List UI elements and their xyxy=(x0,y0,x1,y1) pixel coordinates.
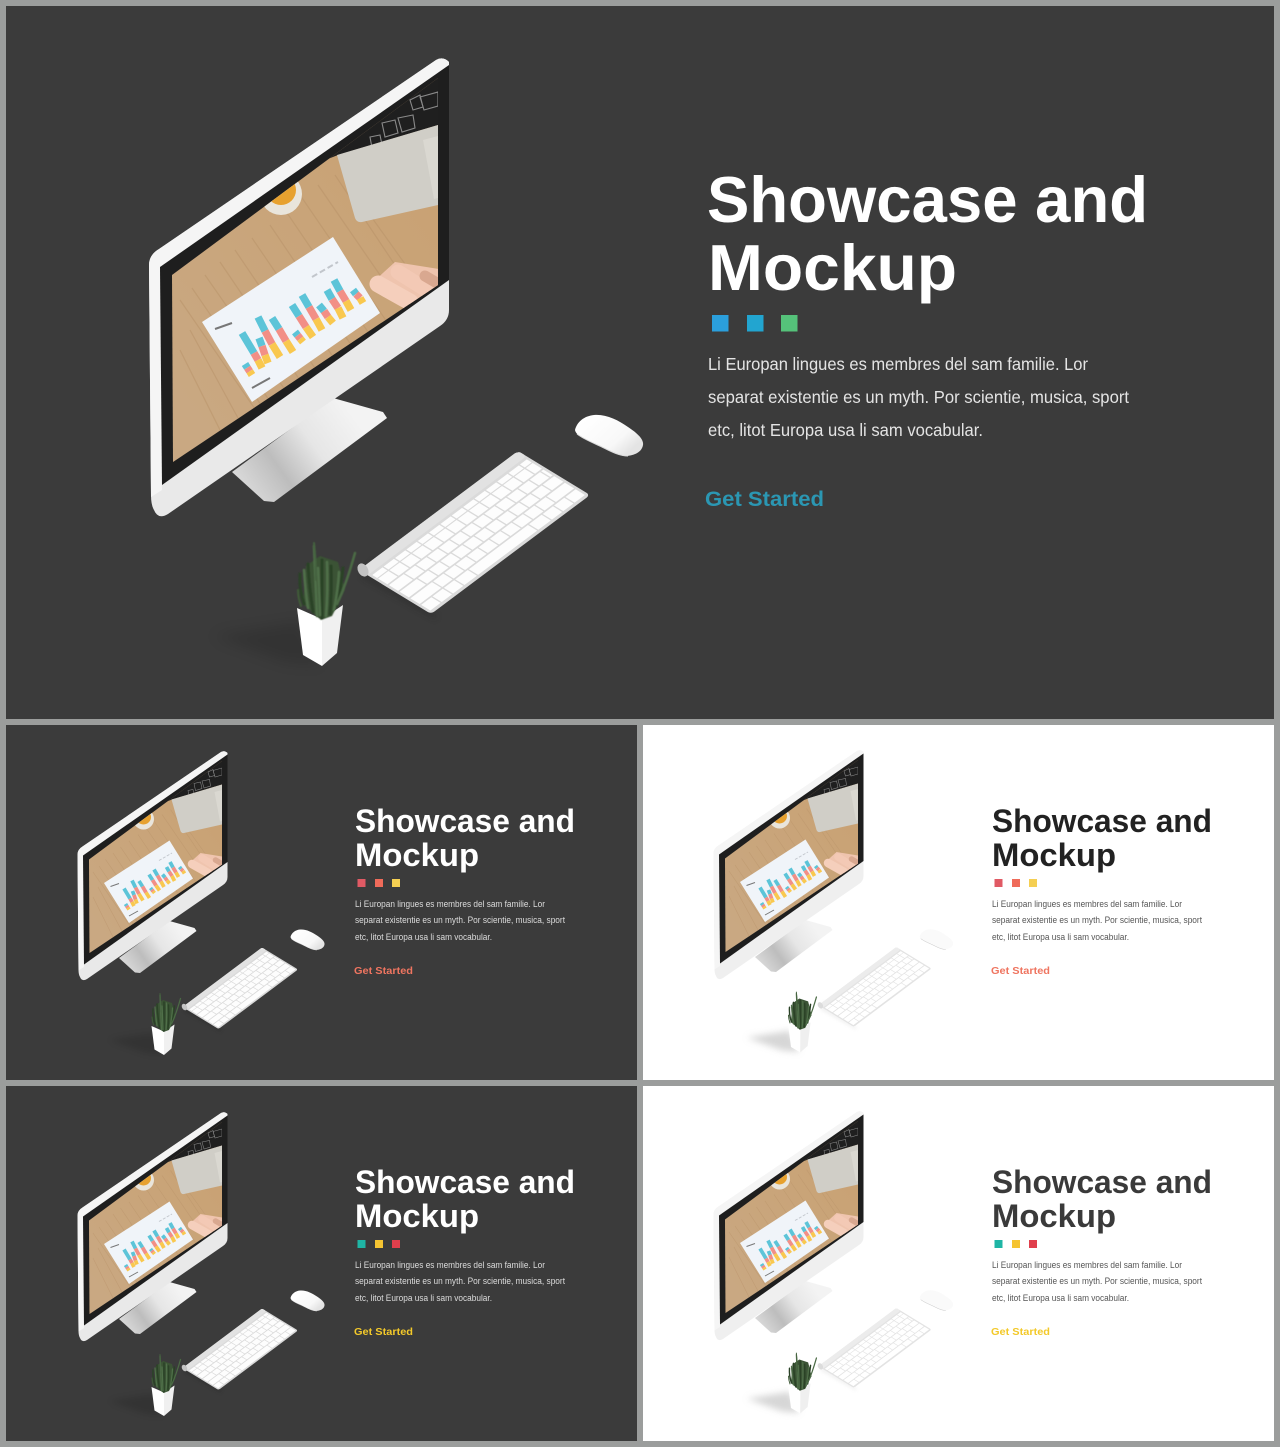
call to action: Get Started xyxy=(354,1326,413,1338)
heading: Showcase and xyxy=(992,803,1212,839)
icon: monitor xyxy=(78,1112,228,1341)
icon: mouse xyxy=(575,415,643,456)
heading xyxy=(707,163,1148,304)
mockup scene xyxy=(78,1112,325,1416)
heading: Showcase and xyxy=(355,1164,575,1200)
panel: dark variant, warm accents xyxy=(6,725,637,1080)
icon: monitor xyxy=(78,751,228,980)
body text: etc, litot Europa usa li sam vocabular. xyxy=(992,1293,1129,1303)
body text: separat existentie es un myth. Por scientie, musica, sport xyxy=(992,915,1203,925)
heading xyxy=(355,1164,575,1234)
body text xyxy=(355,1260,566,1303)
panel: white variant, teal accents xyxy=(643,1086,1274,1441)
body text: separat existentie es un myth. Por scientie, musica, sport xyxy=(355,1276,566,1286)
heading: Mockup xyxy=(355,1198,479,1234)
icon: mouse xyxy=(290,1290,325,1311)
colour squares xyxy=(358,1240,400,1248)
colour squares xyxy=(994,879,1037,887)
heading: Showcase and xyxy=(992,1164,1212,1200)
icon: keyboard xyxy=(181,948,298,1032)
icon: mouse xyxy=(920,1290,953,1310)
mockup scene xyxy=(714,750,953,1052)
body text: etc, litot Europa usa li sam vocabular. xyxy=(708,420,983,440)
panel: main dark showcase xyxy=(6,6,1274,719)
icon: keyboard xyxy=(817,1308,932,1391)
body text xyxy=(992,899,1203,942)
panel: white variant, warm accents xyxy=(643,725,1274,1080)
body text: Li Europan lingues es membres del sam familie. Lor xyxy=(708,354,1088,374)
body text: etc, litot Europa usa li sam vocabular. xyxy=(355,932,492,942)
icon: keyboard xyxy=(817,947,932,1030)
heading xyxy=(992,1164,1212,1234)
body text: separat existentie es un myth. Por scientie, musica, sport xyxy=(708,387,1129,407)
heading: Mockup xyxy=(992,837,1116,873)
body text: Li Europan lingues es membres del sam familie. Lor xyxy=(355,899,545,909)
body text: separat existentie es un myth. Por scientie, musica, sport xyxy=(992,1276,1203,1286)
icon: plant xyxy=(747,1353,816,1413)
body text: etc, litot Europa usa li sam vocabular. xyxy=(355,1293,492,1303)
colour squares xyxy=(712,315,798,332)
heading: Showcase and xyxy=(355,803,575,839)
icon: monitor xyxy=(714,750,864,979)
call to action: Get Started xyxy=(705,488,824,511)
body text: Li Europan lingues es membres del sam familie. Lor xyxy=(992,899,1182,909)
body text xyxy=(992,1260,1203,1303)
icon: monitor xyxy=(149,58,449,516)
mockup scene xyxy=(149,58,643,666)
heading xyxy=(992,803,1212,873)
panel: dark variant, teal accents xyxy=(6,1086,637,1441)
body text: etc, litot Europa usa li sam vocabular. xyxy=(992,932,1129,942)
body text xyxy=(708,354,1129,440)
colour squares xyxy=(358,879,400,887)
body text: Li Europan lingues es membres del sam familie. Lor xyxy=(355,1260,545,1270)
heading: Mockup xyxy=(708,231,957,304)
call to action: Get Started xyxy=(991,1326,1050,1338)
icon: monitor xyxy=(714,1111,864,1340)
mockup scene xyxy=(78,751,325,1055)
body text: separat existentie es un myth. Por scientie, musica, sport xyxy=(355,915,566,925)
call to action: Get Started xyxy=(354,965,413,977)
icon: plant xyxy=(110,994,180,1055)
body text xyxy=(355,899,566,942)
mockup scene xyxy=(714,1111,953,1413)
body text: Li Europan lingues es membres del sam familie. Lor xyxy=(992,1260,1182,1270)
heading: Showcase and xyxy=(707,163,1148,236)
colour squares xyxy=(994,1240,1037,1248)
icon: mouse xyxy=(290,929,325,950)
icon: plant xyxy=(213,543,355,666)
icon: mouse xyxy=(920,929,953,949)
heading: Mockup xyxy=(992,1198,1116,1234)
heading: Mockup xyxy=(355,837,479,873)
icon: keyboard xyxy=(181,1308,298,1393)
icon: plant xyxy=(747,992,816,1052)
icon: keyboard xyxy=(355,451,590,620)
icon: plant xyxy=(110,1354,180,1416)
call to action: Get Started xyxy=(991,965,1050,977)
heading xyxy=(355,803,575,873)
